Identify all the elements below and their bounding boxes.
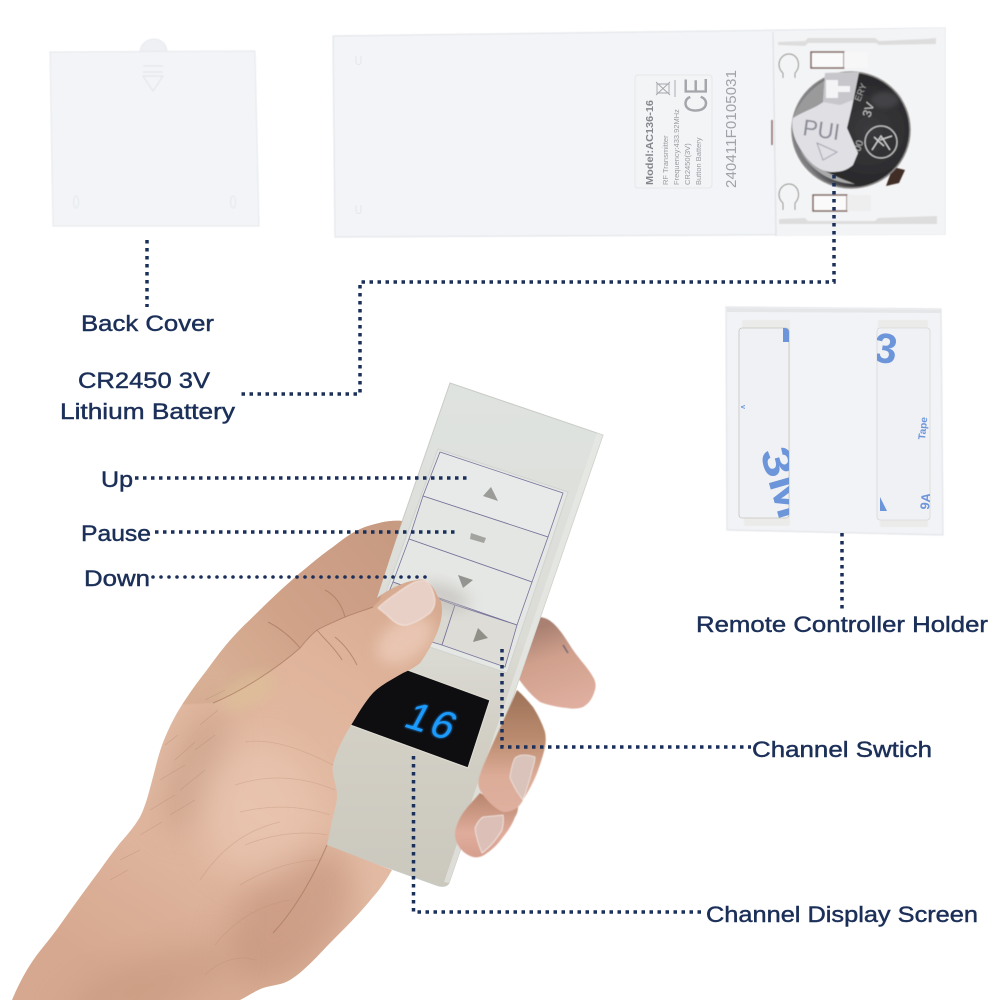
button panel surround [373, 449, 568, 673]
silver top-left of battery [793, 80, 825, 118]
callout line: channel switch [502, 649, 751, 747]
hand hair [110, 690, 225, 880]
hand shading [99, 520, 436, 1000]
product: remote back with battery compartment [333, 28, 945, 237]
holder recesses [742, 320, 928, 527]
finger: ring finger [455, 793, 518, 857]
callout line: holder [840, 533, 844, 610]
label: channel display: Channel Display Screen [706, 902, 978, 927]
remote back screw marks [356, 56, 361, 214]
coin battery: ERY [853, 82, 869, 103]
coin battery: 00 [852, 139, 866, 153]
button: channel right [442, 605, 517, 667]
right adhesive strip: 3 [871, 323, 900, 373]
ring fingernail [475, 815, 503, 853]
remote control body [294, 383, 603, 886]
serial number: 240411F0105031 [723, 70, 740, 188]
product: battery back cover [50, 39, 259, 226]
product label: RF Transmitter [661, 135, 670, 185]
left adhesive strip: 3M [751, 442, 816, 524]
remote back body [333, 28, 945, 237]
left adhesive strip [738, 328, 790, 518]
product label: CE [678, 78, 714, 113]
right adhesive strip: Tape [917, 416, 930, 440]
button: channel left [375, 582, 455, 645]
thumb nail [378, 580, 435, 625]
label: battery [60, 368, 235, 424]
skin creases [213, 590, 373, 933]
callout line: battery [237, 175, 834, 394]
coin battery [792, 72, 910, 188]
product label: Button Battery [694, 137, 703, 185]
down arrow [458, 575, 473, 588]
product: remote controller holder [726, 307, 943, 535]
coin battery: PUI [801, 114, 842, 145]
cover tab [140, 39, 167, 52]
cover slide arrow [143, 66, 163, 91]
callout line: display screen [414, 756, 705, 912]
button: up [423, 452, 563, 537]
right arrow [473, 628, 488, 642]
label: battery: Lithium Battery [60, 399, 235, 424]
label: down: Down [84, 566, 150, 591]
remote housing [294, 383, 603, 886]
display screen [350, 657, 490, 768]
label: pause: Pause [81, 521, 151, 546]
cover screw marks [74, 196, 236, 208]
product label: Frequency:433.92MHz [672, 109, 681, 185]
product label [635, 75, 714, 188]
button: pause [409, 496, 548, 582]
holder plate [726, 307, 943, 535]
label: battery: CR2450 3V [78, 368, 210, 393]
hand silhouette [12, 521, 442, 1000]
callout line: pause [155, 530, 456, 534]
product label: CR2450(3V) [683, 143, 692, 185]
palm wrinkles [200, 741, 335, 975]
right adhesive strip [876, 328, 930, 520]
label: up: Up [101, 467, 133, 492]
thumb shadow [417, 577, 473, 615]
label: channel switch: Channel Swtich [752, 737, 932, 762]
callout line: down [153, 575, 429, 579]
hand holding remote [12, 515, 443, 1000]
right edge highlight [444, 433, 603, 883]
coin battery: 3V [860, 101, 877, 119]
cover plate [50, 51, 259, 226]
finger: index fingertip behind remote [518, 617, 596, 709]
callout line: back cover [145, 240, 149, 307]
product label: Model:AC136-16 [645, 100, 656, 185]
battery pull sticker [792, 72, 859, 172]
label: holder: Remote Controller Holder [696, 612, 988, 637]
battery compartment recess [772, 28, 945, 236]
callout line: up [135, 476, 471, 480]
right adhesive strip: 9A [917, 492, 934, 510]
left adhesive strip: v [739, 405, 746, 409]
middle fingernail [510, 755, 535, 800]
up arrow [483, 487, 498, 501]
finger: middle finger [478, 690, 546, 812]
channel number: 16 [398, 695, 464, 748]
pause bar [470, 533, 486, 543]
index finger region [170, 515, 405, 705]
label: back cover: Back Cover [81, 311, 214, 336]
button: down [393, 539, 532, 625]
